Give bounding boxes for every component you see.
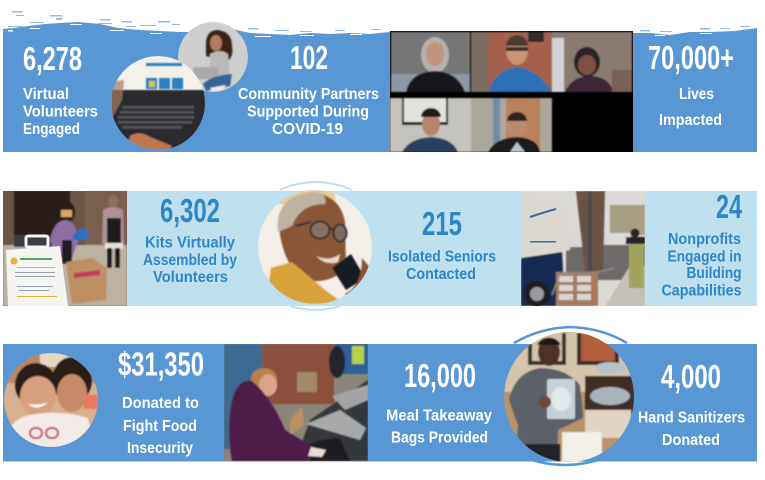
stat: 215 isolated seniors (388, 205, 496, 283)
stat: 24 nonprofits: Nonprofits (668, 231, 741, 248)
stat: 16,000 meal bags (386, 357, 492, 446)
stat: 102 community partners: COVID-19 (272, 121, 343, 138)
stat: 16,000 meal bags: Bags Provided (391, 430, 488, 446)
stat: $31,350 donated: Fight Food (123, 418, 197, 435)
stat: 4,000 hand sanitizers: Donated (662, 432, 720, 449)
stat: 70,000+ lives impacted (648, 39, 734, 129)
stat: 6,302 kits assembled: 6,302 (160, 192, 220, 229)
photo: women's lunch place volunteers (3, 191, 127, 306)
stat: 6,278 virtual volunteers (23, 40, 98, 138)
stat: 215 isolated seniors: Isolated Seniors (388, 248, 496, 266)
photo: two smiling children (4, 353, 98, 450)
stat: 6,302 kits assembled: Volunteers (153, 269, 228, 286)
stat: 6,302 kits assembled: Assembled by (143, 252, 237, 269)
stat: 6,278 virtual volunteers: 6,278 (23, 40, 82, 77)
panel: bottom stats band (3, 327, 757, 465)
photo: video call grid (390, 31, 633, 152)
photo: laptop virtual volunteering (111, 56, 206, 152)
stat: $31,350 donated: Donated to (122, 395, 199, 412)
stat: 24 nonprofits: Capabilities (662, 282, 742, 300)
stat: $31,350 donated: Insecurity (127, 440, 193, 457)
stat: 215 isolated seniors: Contacted (406, 266, 476, 283)
stat: 16,000 meal bags: Meal Takeaway (386, 408, 492, 424)
stat: 24 nonprofits: Engaged in (668, 248, 742, 266)
panel: top stats band (3, 11, 757, 152)
photo: woman with laptop (178, 22, 248, 92)
photo: woman packing meal bags (224, 344, 368, 461)
stat: 6,278 virtual volunteers: Engaged (23, 121, 80, 138)
stat: 102 community partners: 102 (290, 39, 328, 76)
stat: 4,000 hand sanitizers: 4,000 (661, 358, 721, 395)
stat: 70,000+ lives impacted: Lives (679, 86, 714, 103)
stat: $31,350 donated (118, 346, 204, 457)
stat: 215 isolated seniors: 215 (422, 205, 462, 242)
photo: food delivery truck (521, 191, 645, 307)
stat: 24 nonprofits (662, 188, 742, 300)
stat: 6,278 virtual volunteers: Virtual (23, 86, 69, 103)
photo: man holding hand sanitizers (504, 332, 635, 462)
stat: 6,278 virtual volunteers: Volunteers (23, 104, 98, 120)
stat: 16,000 meal bags: 16,000 (404, 357, 476, 394)
stat: 4,000 hand sanitizers (638, 358, 745, 449)
stat: 4,000 hand sanitizers: Hand Sanitizers (638, 410, 745, 426)
icon: brush ring around photo (514, 327, 627, 465)
stat: 24 nonprofits: 24 (716, 188, 742, 225)
stat: $31,350 donated: $31,350 (118, 346, 204, 382)
panel: middle stats band (3, 182, 757, 310)
stat: 6,302 kits assembled (143, 192, 237, 286)
stat: 102 community partners: Supported During (247, 104, 369, 120)
stat: 70,000+ lives impacted: 70,000+ (648, 39, 734, 76)
stat: 70,000+ lives impacted: Impacted (659, 112, 722, 129)
stat: 6,302 kits assembled: Kits Virtually (145, 234, 235, 252)
stat: 102 community partners: Community Partners (238, 86, 379, 103)
stat: 24 nonprofits: Building (686, 265, 742, 282)
icon: brush ring around senior photo (280, 182, 352, 310)
photo: senior on the phone (258, 190, 372, 304)
stat: 102 community partners (238, 39, 379, 138)
